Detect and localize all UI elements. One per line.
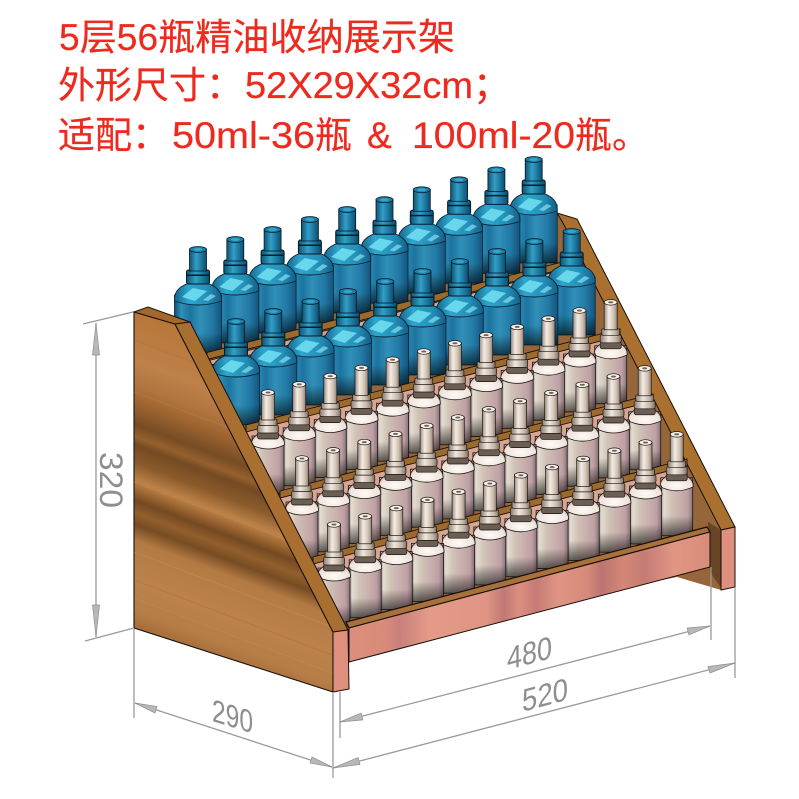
right panel end cap [721,527,735,590]
shelf 3 [280,394,653,511]
title line 3: fit: 100ml-20 [412,115,575,156]
dimension 480 [340,567,711,738]
title line 3: fit: & [367,115,392,156]
title line 3: fit: 瓶 [315,115,352,156]
panel end cap [333,630,349,692]
dimension 290: 290 [212,692,253,740]
title line 2: outer size: 外形尺寸： [58,65,243,106]
title line 2: outer size [58,65,510,106]
title line 3: fit: 瓶。 [575,115,649,156]
left side panel [134,307,349,692]
dimension 480: 480 [507,629,552,677]
front blue bottle row [212,228,595,425]
panel sloped edge [175,322,348,632]
shelf 4 [313,459,687,577]
rack interior and right panel inner face [190,213,721,640]
white bottle row 3 [318,432,693,626]
title line 1: 5层56瓶精油收纳展示架 [59,17,455,58]
dimension 290 [134,629,333,778]
title line 2: outer size: 52X29X32cm [245,65,473,106]
right panel sloped edge [557,213,735,530]
front board top lip [346,527,710,628]
white bottle row 1 [252,300,627,494]
white bottle row 2 [286,366,661,560]
dimension 520 [333,587,735,768]
title line 3: fit: 50ml-36 [172,115,315,156]
dimension 320 [83,312,134,641]
back blue bottle row [174,156,557,353]
front board [346,527,710,662]
panel top edge [134,307,190,324]
shadow by front board [708,522,721,588]
panel face with wood grain [134,312,333,692]
title text [58,17,649,156]
title line 2: outer size: ； [473,65,510,106]
title line 3: fit [58,115,649,156]
title line 3: fit: 适配： [58,115,169,156]
shelf 2 [246,329,620,445]
dimension 520: 520 [522,671,568,719]
shelf 1 [207,257,582,366]
right side panel [557,213,735,590]
front board face [349,532,710,662]
dimension 320: 320 [93,452,129,508]
